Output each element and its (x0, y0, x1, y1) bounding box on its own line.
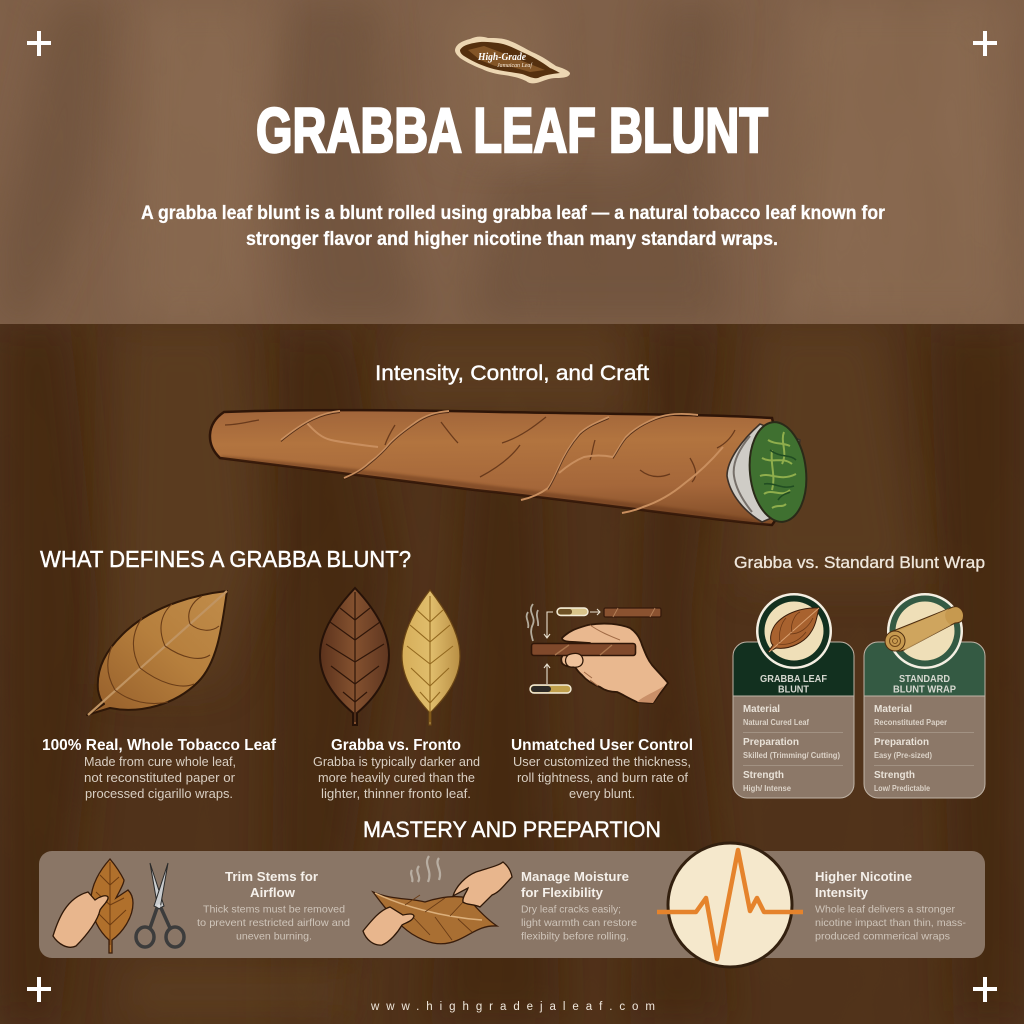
text: higher nicotine: Intensity (815, 886, 868, 900)
subtitle: Intensity, Control, and Craft (375, 362, 649, 385)
body: grabba vs fronto: lighter, thinner fronto leaf. (321, 787, 471, 801)
icon: tobacco leaf (87, 591, 227, 715)
text: trim stems: Trim Stems for (225, 870, 318, 884)
icon: dark grabba leaf (320, 588, 389, 725)
label: grabba leaf blunt: GRABBA LEAF (760, 674, 827, 685)
label: standard blunt wrap: STANDARD (899, 674, 950, 685)
column: whole tobacco leaf (42, 591, 277, 801)
icon: hand rolling blunt (527, 604, 668, 703)
text: manage moisture: flexibilty before rolling. (521, 930, 629, 942)
body: user control: User customized the thickness, (513, 755, 691, 769)
icon: plus bottom-right (973, 977, 997, 1002)
label: grabba leaf blunt: BLUNT (778, 684, 809, 696)
label: standard blunt wrap: BLUNT WRAP (893, 684, 956, 696)
table: grabba attributes: Material (743, 703, 780, 715)
body: whole leaf: Made from cure whole leaf, (84, 755, 236, 769)
table: standard attributes: Easy (Pre-sized) (874, 751, 932, 760)
table: standard attributes: Reconstituted Paper (874, 718, 947, 727)
heading: user control: Unmatched User Control (511, 737, 693, 754)
icon: plus top-right (973, 31, 997, 56)
panel: mastery tips (39, 843, 985, 967)
icon: plus bottom-left (27, 977, 51, 1002)
table: standard attributes: Low/ Predictable (874, 784, 930, 793)
table: grabba attributes: Preparation (743, 736, 799, 748)
label: grabba leaf blunt (760, 674, 827, 696)
title: GRABBA LEAF BLUNT (256, 96, 768, 166)
body: grabba vs fronto (313, 755, 480, 801)
text: higher nicotine (815, 870, 967, 942)
icon: leaf medallion (756, 593, 832, 669)
text: higher nicotine: Higher Nicotine (815, 870, 912, 884)
icon: trimming leaf and scissors (53, 859, 184, 953)
text: manage moisture: light warmth can restore (521, 917, 637, 929)
body: whole leaf: not reconstituted paper or (84, 771, 235, 785)
text: trim stems (197, 870, 350, 942)
logo: Jamaican Leaf (497, 62, 533, 69)
icon: plus top-left (27, 31, 51, 56)
body: user control: every blunt. (569, 787, 635, 801)
text: manage moisture: Dry leaf cracks easily; (521, 904, 621, 916)
table: standard attributes: Strength (874, 769, 915, 781)
logo (455, 37, 570, 83)
table: grabba attributes: Strength (743, 769, 784, 781)
heading: mastery: MASTERY AND PREPARTION (363, 817, 661, 842)
column: user control (511, 604, 693, 801)
text: manage moisture: Manage Moisture (521, 870, 629, 884)
label: standard blunt wrap (893, 674, 956, 696)
table: standard attributes: Preparation (874, 736, 929, 748)
text: higher nicotine: produced commerical wraps (815, 930, 950, 942)
icon: pulse medallion (657, 843, 803, 967)
text: higher nicotine: Whole leaf delivers a stronger (815, 904, 956, 916)
table: grabba attributes (743, 703, 843, 793)
body: user control: roll tightness, and burn rate of (517, 771, 689, 785)
icon: light fronto leaf (402, 590, 460, 725)
table: grabba attributes: Natural Cured Leaf (743, 718, 809, 727)
intro text: A grabba leaf blunt is a blunt rolled using grabba leaf — a natural tobacco leaf known for (141, 202, 885, 224)
intro text: stronger flavor and higher nicotine than many standard wraps. (246, 228, 778, 250)
icon: hands flexing leaf (363, 856, 512, 945)
card: standard blunt wrap (864, 593, 985, 798)
heading: comparison: Grabba vs. Standard Blunt Wrap (734, 553, 985, 572)
text: trim stems: to prevent restricted airflow and (197, 917, 350, 929)
body: user control (513, 755, 691, 801)
column: grabba vs fronto (313, 588, 480, 801)
body: grabba vs fronto: Grabba is typically darker and (313, 755, 480, 769)
website url: www.highgradejaleaf.com (370, 1001, 655, 1013)
background: lower leaf band (0, 324, 1024, 1024)
body: whole leaf: processed cigarillo wraps. (85, 787, 233, 801)
background: upper leaf band (0, 0, 1024, 324)
icon: wrap medallion (885, 593, 963, 669)
logo: High-Grade (477, 51, 526, 63)
table: standard attributes: Material (874, 703, 912, 715)
table: grabba attributes: Skilled (Trimming/ Cutting) (743, 751, 840, 760)
heading: what defines: WHAT DEFINES A GRABBA BLUNT? (40, 546, 411, 572)
illustration: blunt (210, 410, 811, 525)
body: whole leaf (84, 755, 236, 801)
text: trim stems: Thick stems must be removed (203, 904, 345, 916)
card: grabba leaf blunt (733, 593, 854, 798)
text: trim stems: uneven burning. (236, 930, 312, 942)
heading: grabba vs fronto: Grabba vs. Fronto (331, 737, 461, 754)
body: grabba vs fronto: more heavily cured than the (318, 771, 475, 785)
heading: whole leaf: 100% Real, Whole Tobacco Leaf (42, 737, 277, 754)
text: trim stems: Airflow (250, 886, 295, 900)
text: manage moisture (521, 870, 637, 942)
text: higher nicotine: nicotine impact than thin, mass- (815, 917, 967, 929)
text: manage moisture: for Flexibility (521, 886, 603, 900)
table: grabba attributes: High/ Intense (743, 784, 792, 793)
table: standard attributes (874, 703, 974, 793)
intro text (141, 202, 885, 250)
